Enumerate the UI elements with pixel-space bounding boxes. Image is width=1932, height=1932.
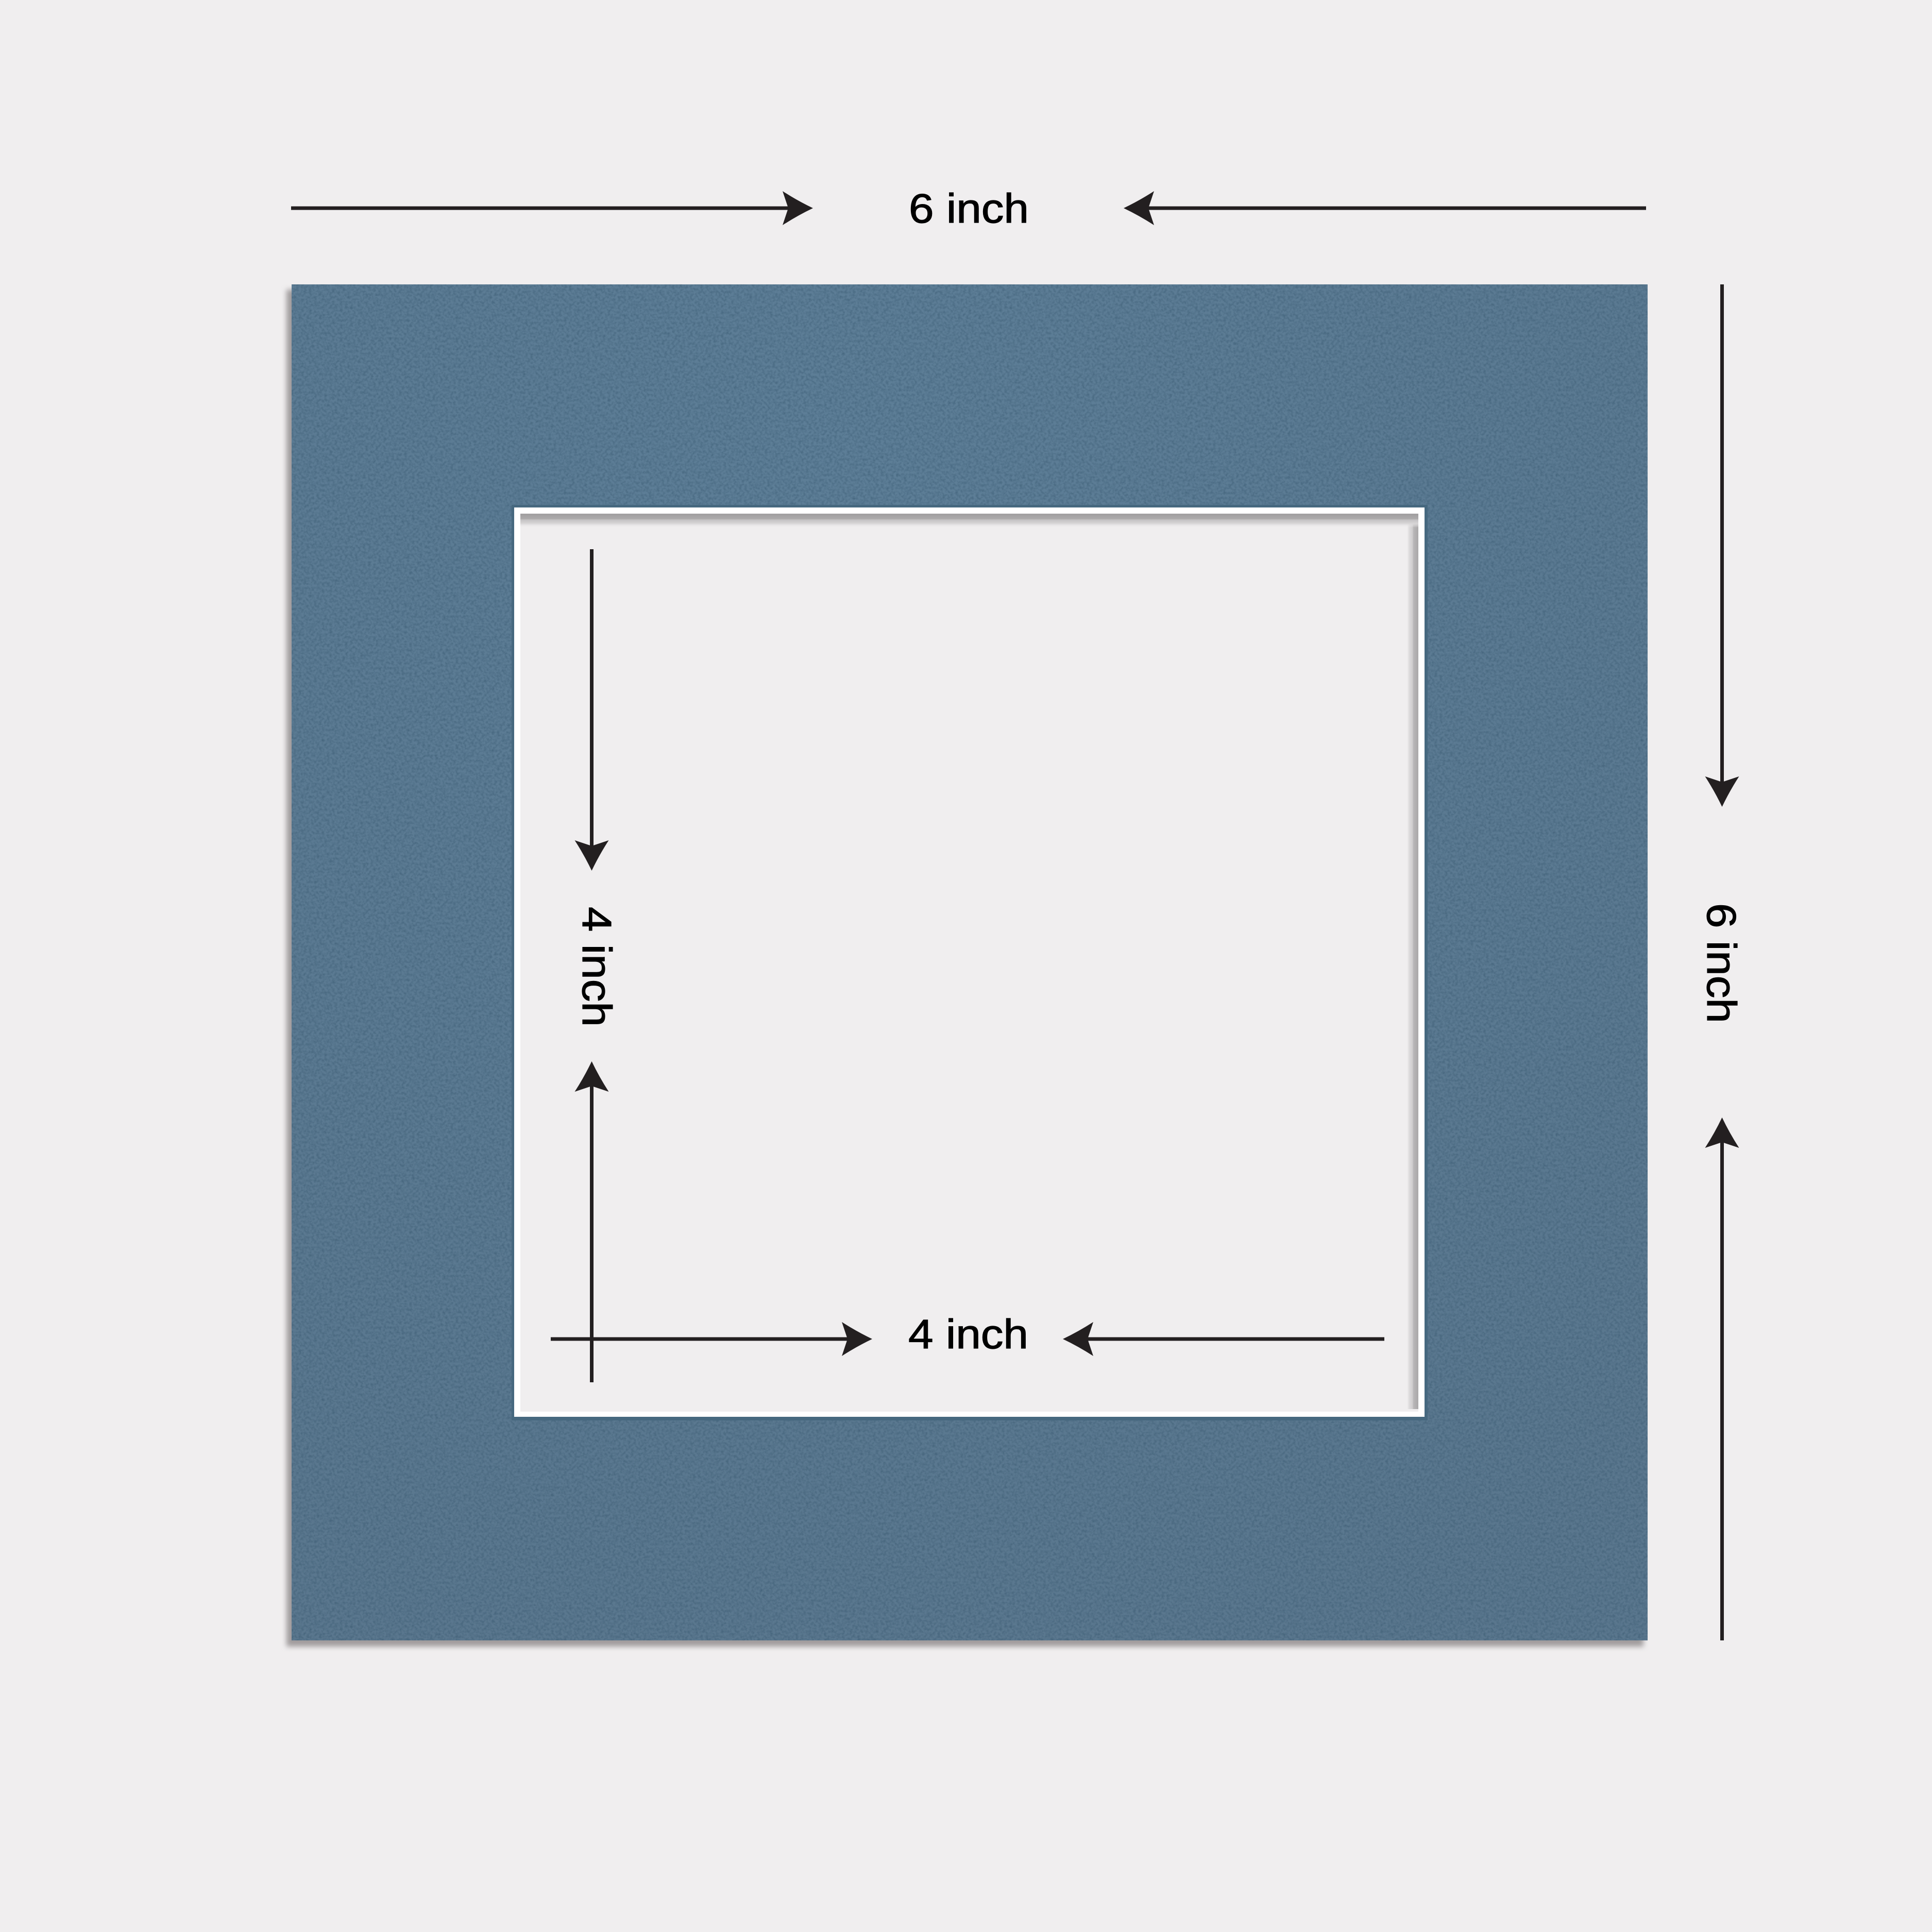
arrow: inner left pointing up — [575, 1061, 609, 1382]
label: 6 inch height: 6 inch — [1699, 903, 1744, 1023]
dimension: inner left 4 inch — [574, 549, 620, 1382]
mat board paper grain — [292, 284, 1648, 1640]
arrow: right side pointing up — [1705, 1117, 1739, 1640]
dimension: inner bottom 4 inch — [551, 1311, 1384, 1357]
window top inner shadow — [520, 514, 1418, 528]
white bevel frame — [514, 507, 1425, 1417]
panel: blue mat board with window — [286, 284, 1648, 1647]
arrow: inner bottom pointing left — [1063, 1322, 1384, 1356]
window right inner shadow — [1406, 514, 1418, 1409]
window opening — [520, 514, 1418, 1412]
arrow: inner bottom pointing right — [551, 1322, 872, 1356]
dimension: top 6 inch — [291, 185, 1646, 231]
label: 4 inch width: 4 inch — [908, 1311, 1028, 1357]
mat board surface — [292, 284, 1648, 1640]
mat board drop shadow — [286, 290, 1643, 1647]
arrow: right side pointing down — [1705, 284, 1739, 807]
window bevel shadow line — [512, 505, 1428, 1420]
label: 6 inch width: 6 inch — [909, 185, 1029, 231]
dimension: right 6 inch — [1699, 284, 1744, 1640]
label: 4 inch height: 4 inch — [574, 907, 620, 1027]
arrow: inner left pointing down — [575, 549, 609, 871]
arrow: top right pointing left — [1124, 191, 1646, 225]
arrow: top left pointing right — [291, 191, 813, 225]
